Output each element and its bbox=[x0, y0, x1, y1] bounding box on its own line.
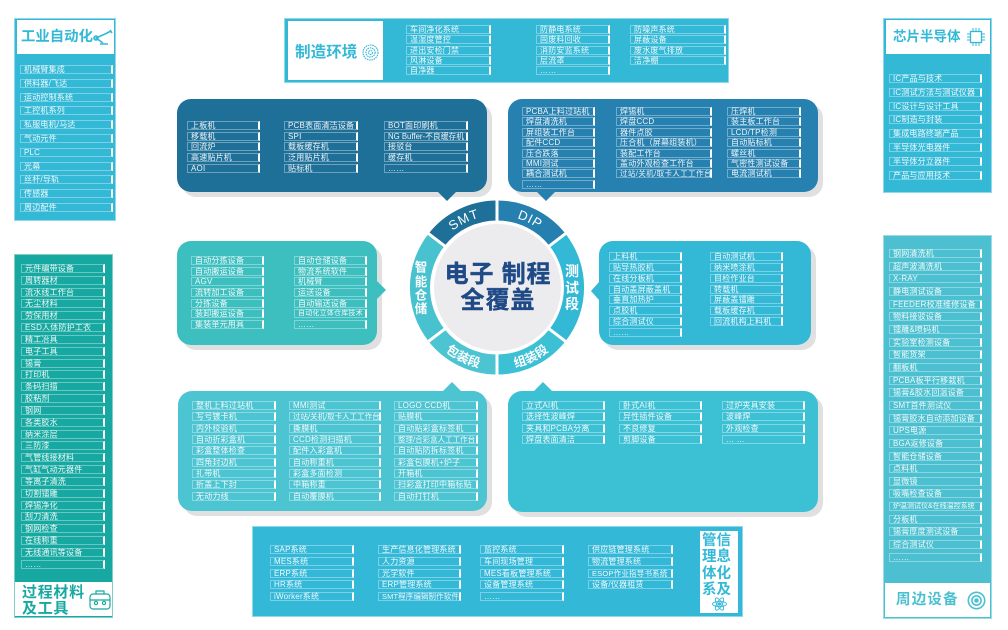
list: DIP column 2: 焊锡机 bbox=[620, 107, 645, 116]
list: packing column 1: 整机上料过站机 bbox=[196, 401, 253, 410]
list: warehouse column 2: 运送设备 bbox=[298, 288, 331, 297]
list: DIP column 1 bbox=[522, 107, 595, 189]
panel: 制造环境 bbox=[284, 18, 729, 83]
segment: 智能仓储: 能 bbox=[415, 274, 428, 289]
list: packing column 2 bbox=[289, 401, 381, 501]
panel: 周边设备 bbox=[883, 235, 992, 619]
list: SMT column 3: 接驳台 bbox=[388, 142, 413, 151]
segment: 包装段 bbox=[430, 330, 496, 374]
list: test column 2: 目检作业台 bbox=[714, 274, 755, 283]
list: system column 4 bbox=[588, 545, 673, 589]
list: environment column 2: 层流罩 bbox=[540, 56, 565, 65]
list: SMT column 2 bbox=[284, 121, 358, 173]
list: warehouse column 1: 流转加工设备 bbox=[195, 288, 244, 297]
list: DIP column 2: 过站/关机/取卡人工工作台 bbox=[620, 169, 712, 178]
list: test column 1: …… bbox=[613, 328, 629, 337]
list: test column 2: 转载机 bbox=[714, 285, 739, 294]
list: SMT column 2: 贴标机 bbox=[288, 164, 313, 173]
list: material items: 条码扫描 bbox=[25, 382, 58, 391]
list: test column 1: 在线分板机 bbox=[613, 274, 654, 283]
list: material items: 气缸气动元器件 bbox=[25, 465, 82, 474]
list: peripheral items: 实验室检测设备 bbox=[893, 338, 950, 347]
list: peripheral items: X-RAY bbox=[893, 274, 918, 283]
list: warehouse column 1: 分拣设备 bbox=[195, 299, 228, 308]
list: SMT column 2: 泛用贴片机 bbox=[288, 153, 329, 162]
list: test column 2: 自动测试机 bbox=[714, 252, 755, 261]
list: system column 2 bbox=[378, 545, 461, 601]
list: assembly column 3: 过炉夹具安装 bbox=[726, 401, 775, 410]
arrow: DIP pointer bbox=[537, 192, 555, 201]
list: system column 4: 设备/仪器租赁 bbox=[592, 580, 644, 589]
list: assembly column 1: 选择性波峰焊 bbox=[526, 412, 575, 421]
panel: 组装段 bbox=[508, 391, 818, 512]
heading: 管信理息体化系及 bbox=[700, 531, 738, 613]
list: material items: 电子工具 bbox=[25, 347, 58, 356]
list: peripheral items bbox=[889, 249, 982, 562]
list: DIP column 2: 焊盘CCD bbox=[620, 117, 654, 126]
segment: 智能仓储 bbox=[410, 234, 444, 341]
segment: 智能仓储: 储 bbox=[415, 301, 428, 316]
list: assembly column 1: 焊盘表面清洁 bbox=[526, 435, 575, 444]
list: packing column 1 bbox=[192, 401, 276, 501]
list: system column 1: MES系统 bbox=[274, 557, 308, 566]
list: test column 2: 纳米喷涂机 bbox=[714, 263, 755, 272]
list: material items: 胶粘剂 bbox=[25, 394, 50, 403]
list: test column 1: 垂直加热炉 bbox=[613, 295, 654, 304]
segment: 智能仓储: 智 bbox=[415, 260, 427, 274]
center wheel bbox=[410, 200, 584, 374]
list: packing column 2: 过站/关机/取卡人工工作台 bbox=[293, 412, 380, 421]
list: SMT column 1 bbox=[187, 121, 260, 173]
list: automation items: 周边配件 bbox=[24, 203, 57, 212]
list: system column 3: 设备管理系统 bbox=[484, 580, 533, 589]
list: peripheral items: SMT首件测试仪 bbox=[893, 401, 952, 410]
list: system column 1: ERP系统 bbox=[274, 568, 307, 578]
list: DIP column 3: 电流测试机 bbox=[731, 169, 772, 178]
segment: 测试段 bbox=[550, 234, 584, 341]
list: peripheral items: 锡膏胶水自动添加设备 bbox=[893, 414, 975, 423]
list: SMT column 2: 载板缓存机 bbox=[288, 142, 329, 151]
list: system column 1: HR系统 bbox=[274, 580, 302, 589]
heading: 过程材料及工具: 及工具 bbox=[22, 600, 69, 616]
list: DIP column 1: MMI测试 bbox=[526, 159, 559, 168]
list: DIP column 1: 配件CCD bbox=[526, 138, 560, 147]
list: packing column 3: 自动打钉机 bbox=[398, 492, 439, 501]
list: environment column 2: 消防安监系统 bbox=[540, 46, 589, 55]
list: peripheral items: 吸嘴检查设备 bbox=[893, 489, 942, 498]
list: semiconductor items: IC测试方法与测试仪器 bbox=[893, 88, 975, 97]
list: peripheral items: 锡膏厚度测试设备 bbox=[893, 527, 959, 536]
list: material items: 周转器材 bbox=[25, 276, 58, 285]
segment: DIP bbox=[498, 200, 564, 245]
list: peripheral items: 点料机 bbox=[893, 464, 918, 473]
list: assembly column 3: … … bbox=[726, 435, 745, 444]
segment: 包装段: 包装段 bbox=[447, 344, 480, 368]
list: material items: …… bbox=[25, 560, 41, 569]
list: automation items: 机械臂集成 bbox=[24, 65, 65, 74]
list: SMT column 1: AOI bbox=[191, 164, 205, 173]
heading: 管信理息体化系及: 体化 bbox=[702, 566, 731, 582]
list: material items: 元件编带设备 bbox=[25, 264, 74, 273]
list: material items bbox=[21, 264, 105, 569]
list: warehouse column 2: …… bbox=[298, 320, 314, 329]
panel: 管理信息化体系 bbox=[252, 526, 743, 617]
arrow: test pointer bbox=[591, 282, 599, 300]
list: DIP column 1: 压合跌落 bbox=[526, 149, 559, 158]
list: assembly column 2: 不良修复 bbox=[623, 424, 656, 433]
list: warehouse column 1 bbox=[191, 256, 264, 329]
list: DIP column 3: 气密性测试设备 bbox=[731, 159, 788, 168]
list: environment column 2: 固废料回收 bbox=[540, 35, 581, 44]
list: semiconductor items bbox=[889, 74, 982, 180]
list: environment column 3: 防噪声系统 bbox=[634, 25, 675, 34]
list: material items: 锡膏 bbox=[25, 359, 41, 368]
list: SMT column 3: …… bbox=[388, 164, 404, 173]
list: automation items: 私服电机/马达 bbox=[24, 120, 76, 129]
list: semiconductor items: IC产品与技术 bbox=[893, 74, 942, 83]
list: system column 2: 人力资源 bbox=[382, 557, 415, 566]
list: environment column 3 bbox=[630, 25, 726, 65]
list: test column 1: 上料机 bbox=[613, 252, 638, 261]
list: test column 1 bbox=[609, 252, 682, 337]
list: peripheral items: 物料接驳设备 bbox=[893, 312, 942, 321]
list: DIP column 1: 焊盘清洗机 bbox=[526, 117, 567, 126]
heading: 周边设备 bbox=[885, 583, 990, 617]
heading: 制造环境: 制造环境 bbox=[295, 44, 357, 61]
list: material items: 三防漆 bbox=[25, 441, 50, 450]
list: material items: ESD人体防护工衣 bbox=[25, 323, 91, 332]
list: warehouse column 2: 自动化立体仓库技术 bbox=[298, 310, 363, 317]
list: peripheral items: UPS电源 bbox=[893, 426, 926, 435]
heading: 芯片半导体: 芯片半导体 bbox=[893, 29, 960, 44]
list: packing column 3 bbox=[394, 401, 478, 501]
list: test column 2 bbox=[710, 252, 783, 326]
list: material items: 各类胶水 bbox=[25, 418, 58, 427]
list: packing column 2: 彩盒多面检测 bbox=[293, 469, 342, 478]
panel: 包装段 bbox=[178, 391, 487, 511]
list: material items: 切割镭雕 bbox=[25, 489, 58, 498]
segment: 测试段: 试 bbox=[565, 280, 579, 296]
list: peripheral items: 显微镜 bbox=[893, 477, 918, 486]
list: test column 1: 点胶机 bbox=[613, 306, 638, 315]
arrow: SMT pointer bbox=[438, 192, 456, 201]
panel: 过程材料及工具 bbox=[14, 254, 113, 618]
heading: 过程材料及工具: 过程材料 bbox=[22, 584, 85, 601]
list: environment column 2: 防静电系统 bbox=[540, 25, 581, 34]
heading: 工业自动化: 工业自动化 bbox=[21, 29, 93, 45]
list: automation items: 气动元件 bbox=[24, 134, 57, 143]
list: assembly column 2: 异性插件设备 bbox=[623, 412, 672, 421]
list: warehouse column 2: 机械臂 bbox=[298, 277, 323, 286]
list: assembly column 3: 外观检查 bbox=[726, 424, 759, 433]
list: material items: 气管线接材料 bbox=[25, 453, 74, 462]
list: peripheral items: 智能仓储设备 bbox=[893, 452, 942, 460]
heading: 制造环境 bbox=[288, 21, 383, 80]
heading: 管信理息体化系及: 管信 bbox=[702, 533, 731, 549]
list: material items: 刮刀清洗 bbox=[25, 512, 58, 521]
list: material items: 等离子清洗 bbox=[25, 477, 66, 486]
list: assembly column 1 bbox=[522, 401, 605, 444]
list: test column 1: 自动盖屏蔽盖机 bbox=[613, 285, 670, 294]
list: warehouse column 1: 自动搬运设备 bbox=[195, 267, 244, 276]
panel: 测试段 bbox=[599, 241, 811, 345]
arrow: assembly pointer bbox=[534, 382, 552, 391]
list: automation items: 工控机系列 bbox=[24, 106, 65, 115]
list: system column 3: 监控系统 bbox=[484, 545, 517, 554]
list: peripheral items: 炉温测试仪&在线温控系统 bbox=[893, 503, 975, 510]
list: packing column 2: 配件入彩盒机 bbox=[293, 446, 342, 455]
list: system column 2: ERP管理系统 bbox=[382, 580, 432, 589]
heading: 芯片半导体 bbox=[886, 20, 990, 54]
list: DIP column 1: PCBA上料过站机 bbox=[526, 107, 590, 116]
list: peripheral items: 超声波清洗机 bbox=[893, 262, 942, 271]
list: assembly column 2: 剪脚设备 bbox=[623, 435, 656, 444]
list: material items: 钢网 bbox=[25, 406, 41, 415]
list: material items: 钢网检查 bbox=[25, 524, 58, 533]
heading: 过程材料及工具 bbox=[15, 582, 112, 616]
list: peripheral items: FEEDER校准维修设备 bbox=[893, 300, 976, 309]
hub: center title: 电子 制程 bbox=[445, 261, 551, 288]
segment: 测试段: 段 bbox=[565, 296, 579, 312]
segment: SMT bbox=[430, 200, 496, 245]
list: system column 2: 光学软件 bbox=[382, 568, 415, 578]
list: SMT column 3: BOT面印刷机 bbox=[388, 121, 438, 130]
list: DIP column 2 bbox=[616, 107, 712, 178]
list: environment column 1: 进出安检门禁 bbox=[410, 46, 459, 55]
list: packing column 1: 彩盒整体检查 bbox=[196, 446, 245, 455]
list: DIP column 3: LCD/TP检测 bbox=[731, 128, 777, 137]
hub: center title bbox=[434, 224, 561, 351]
segment: DIP: DIP bbox=[518, 210, 542, 226]
panel: SMT bbox=[177, 99, 487, 192]
list: peripheral items: BGA返修设备 bbox=[893, 439, 943, 448]
list: assembly column 2: 卧式AI机 bbox=[623, 401, 656, 410]
list: test column 2: 屏蔽盖镭雕 bbox=[714, 295, 755, 304]
list: system column 4: 供应链管理系统 bbox=[592, 545, 649, 554]
list: packing column 3: 整理/合彩盒人工工作台 bbox=[398, 435, 475, 444]
list: peripheral items: 综合测试仪 bbox=[893, 540, 934, 549]
list: DIP column 3: 压焊机 bbox=[731, 107, 756, 116]
list: packing column 2: MMI测试 bbox=[293, 401, 326, 410]
list: peripheral items: 分板机 bbox=[893, 515, 918, 524]
list: environment column 3: 废水废气排放 bbox=[634, 46, 683, 55]
list: DIP column 2: 盖动外观检查工作台 bbox=[620, 159, 694, 168]
list: peripheral items: 钢网清洗机 bbox=[893, 249, 934, 258]
list: packing column 1: 自动折彩盒机 bbox=[196, 435, 245, 444]
panel: 芯片半导体 bbox=[883, 18, 992, 193]
list: system column 3: MES看板管理系统 bbox=[484, 568, 551, 578]
list: packing column 1: 折盖上下封 bbox=[196, 480, 237, 489]
list: semiconductor items: 集成电路终端产品 bbox=[893, 129, 959, 138]
list: packing column 1: 内外校验机 bbox=[196, 424, 237, 433]
list: automation items bbox=[20, 65, 113, 212]
list: warehouse column 1: 自动分拣设备 bbox=[195, 256, 244, 265]
list: test column 1: 综合测试仪 bbox=[613, 317, 654, 326]
list: system column 4: 物流管理系统 bbox=[592, 557, 641, 566]
list: environment column 3: 屏蔽设备 bbox=[634, 35, 667, 44]
list: material items: 精工冶具 bbox=[25, 335, 58, 344]
list: packing column 1: 四角封边机 bbox=[196, 458, 237, 467]
list: automation items: 供料器/飞达 bbox=[24, 79, 67, 88]
list: SMT column 3 bbox=[384, 121, 468, 173]
list: automation items: 光幕 bbox=[24, 162, 40, 171]
list: assembly column 3 bbox=[722, 401, 805, 444]
list: DIP column 1: …… bbox=[526, 180, 542, 189]
list: system column 3 bbox=[480, 545, 564, 601]
list: material items: 在线称重 bbox=[25, 536, 58, 545]
list: automation items: 传感器 bbox=[24, 189, 49, 198]
list: system column 3: 车间现场管理 bbox=[484, 557, 533, 566]
list: automation items: 运动控制系统 bbox=[24, 93, 73, 102]
list: semiconductor items: 半导体分立器件 bbox=[893, 157, 950, 166]
list: test column 2: 载板缓存机 bbox=[714, 306, 755, 315]
list: peripheral items: …… bbox=[893, 553, 909, 562]
list: packing column 3: 开箱机 bbox=[398, 469, 423, 478]
list: semiconductor items: IC制造与封装 bbox=[893, 115, 942, 124]
list: packing column 3: 自动贴彩盒标签机 bbox=[398, 424, 464, 433]
list: semiconductor items: IC设计与设计工具 bbox=[893, 102, 959, 111]
list: system column 4: ESOP作业指导书系统 bbox=[592, 568, 668, 578]
arrow: packing pointer bbox=[443, 382, 461, 391]
segment: 智能仓储: 仓 bbox=[415, 288, 428, 302]
list: automation items: PLC bbox=[24, 148, 40, 157]
list: packing column 3: 自动贴防拆标签机 bbox=[398, 446, 464, 455]
list: system column 3: …… bbox=[484, 592, 500, 601]
list: peripheral items: 锡膏&胶水回温设备 bbox=[893, 388, 964, 397]
heading: 管信理息体化系及: 系及 bbox=[702, 582, 731, 598]
list: material items: 劳保用材 bbox=[25, 311, 58, 320]
list: packing column 3: LOGO CCD机 bbox=[398, 401, 450, 410]
list: packing column 1: 扎带机 bbox=[196, 469, 221, 478]
panel: 工业自动化 bbox=[14, 18, 116, 221]
list: environment column 1: 自净器 bbox=[410, 66, 435, 75]
list: environment column 1: 温湿度管控 bbox=[410, 35, 451, 44]
list: DIP column 3 bbox=[727, 107, 801, 178]
hub: center title: 全覆盖 bbox=[460, 287, 536, 314]
list: environment column 1: 车间净化系统 bbox=[410, 25, 459, 34]
list: DIP column 2: 压合机（屏幕组装机） bbox=[620, 138, 702, 147]
list: material items: 无尘材料 bbox=[25, 299, 58, 308]
list: assembly column 2 bbox=[619, 401, 702, 444]
list: DIP column 3: 螺丝机 bbox=[731, 149, 756, 158]
panel: 智能仓储 bbox=[177, 241, 377, 345]
list: packing column 2: 自动称重机 bbox=[293, 458, 334, 467]
list: environment column 1 bbox=[406, 25, 491, 75]
list: material items: 流水线工作台 bbox=[25, 288, 74, 297]
list: system column 1: iWorker系统 bbox=[274, 592, 319, 601]
list: assembly column 1: 夹具和PCBA分离 bbox=[526, 424, 590, 433]
list: peripheral items: 翻板机 bbox=[893, 363, 918, 372]
list: material items: 无线通讯等设备 bbox=[25, 548, 82, 557]
list: DIP column 2: 装配工作台 bbox=[620, 149, 661, 158]
list: packing column 1: 写号镀卡机 bbox=[196, 412, 237, 421]
list: warehouse column 1: AGV bbox=[195, 277, 212, 286]
heading: 管信理息体化系及: 理息 bbox=[702, 549, 731, 565]
segment: 组装段: 组装段 bbox=[514, 344, 548, 368]
segment: 测试段: 测 bbox=[565, 263, 579, 279]
list: test column 1: 贴导热胶机 bbox=[613, 263, 654, 272]
list: SMT column 2: SPI bbox=[288, 132, 302, 141]
list: warehouse column 2: 自动输送设备 bbox=[298, 299, 347, 308]
list: packing column 2: 撕膜机 bbox=[293, 424, 318, 433]
list: warehouse column 2 bbox=[294, 256, 367, 329]
list: DIP column 2: 器件点胶 bbox=[620, 128, 653, 137]
list: packing column 2: 自动覆膜机 bbox=[293, 492, 334, 501]
list: environment column 1: 风淋设备 bbox=[410, 56, 443, 65]
list: automation items: 丝杆/导轨 bbox=[24, 175, 59, 184]
list: assembly column 1: 立式AI机 bbox=[526, 401, 559, 410]
list: peripheral items: 静电测试设备 bbox=[893, 287, 942, 296]
list: SMT column 1: 回流炉 bbox=[191, 142, 216, 151]
list: semiconductor items: 产品与应用技术 bbox=[893, 171, 950, 180]
list: environment column 2 bbox=[536, 25, 610, 75]
list: environment column 3: 洁净棚 bbox=[634, 56, 659, 65]
list: packing column 2: CCD检测扫描机 bbox=[293, 435, 352, 444]
heading: 工业自动化 bbox=[17, 20, 114, 54]
list: DIP column 3: 自动贴标机 bbox=[731, 138, 772, 147]
list: SMT column 3: 缓存机 bbox=[388, 153, 413, 162]
list: packing column 1: 无动力线 bbox=[196, 492, 229, 501]
segment: 组装段 bbox=[498, 330, 564, 374]
list: packing column 2: 中箱称重 bbox=[293, 480, 326, 489]
list: DIP column 1: 耦合测试机 bbox=[526, 169, 567, 178]
list: DIP column 3: 装主板工作台 bbox=[731, 117, 780, 126]
list: DIP column 1: 屏组装工作台 bbox=[526, 128, 575, 137]
list: material items: 纳米涂层 bbox=[25, 430, 58, 439]
list: system column 1 bbox=[270, 545, 354, 601]
list: semiconductor items: 半导体光电器件 bbox=[893, 143, 950, 152]
panel: DIP bbox=[508, 99, 818, 192]
list: packing column 3: 彩盒包膜机+炉子 bbox=[398, 458, 460, 467]
list: warehouse column 2: 自动仓储设备 bbox=[298, 256, 347, 265]
list: material items: 焊锡净化 bbox=[25, 501, 58, 510]
list: material items: 打印机 bbox=[25, 370, 50, 379]
list: system column 2: SMT程序编辑制作软件 bbox=[382, 592, 459, 601]
list: SMT column 1: 上板机 bbox=[191, 121, 216, 130]
list: warehouse column 2: 物流系统软件 bbox=[298, 267, 347, 276]
list: SMT column 1: 移载机 bbox=[191, 132, 216, 141]
list: peripheral items: 智能货架 bbox=[893, 350, 926, 359]
list: test column 2: 回流机构上料机 bbox=[714, 317, 771, 326]
list: packing column 3: 扫彩盒打印中箱标贴 bbox=[398, 480, 472, 489]
list: SMT column 2: PCB表面清洁设备 bbox=[288, 121, 354, 130]
list: system column 1: SAP系统 bbox=[274, 545, 307, 554]
list: warehouse column 1: 装卸搬运设备 bbox=[195, 309, 244, 318]
list: packing column 3: 贴膜机 bbox=[398, 412, 423, 421]
heading: 周边设备: 周边设备 bbox=[896, 592, 959, 608]
list: peripheral items: 镭雕&喷码机 bbox=[893, 325, 940, 334]
list: SMT column 3: NG Buffer-不良缓存机 bbox=[388, 132, 464, 141]
arrow: warehouse pointer bbox=[377, 281, 386, 299]
list: warehouse column 1: 集装单元用具 bbox=[195, 320, 244, 329]
list: environment column 2: …… bbox=[540, 66, 556, 75]
segment: SMT: SMT bbox=[449, 209, 476, 230]
list: SMT column 1: 高速贴片机 bbox=[191, 153, 232, 162]
list: peripheral items: PCBA板平行移栽机 bbox=[893, 376, 965, 385]
list: system column 2: 生产信息化管理系统 bbox=[382, 545, 456, 554]
list: assembly column 3: 波峰焊 bbox=[726, 412, 751, 421]
